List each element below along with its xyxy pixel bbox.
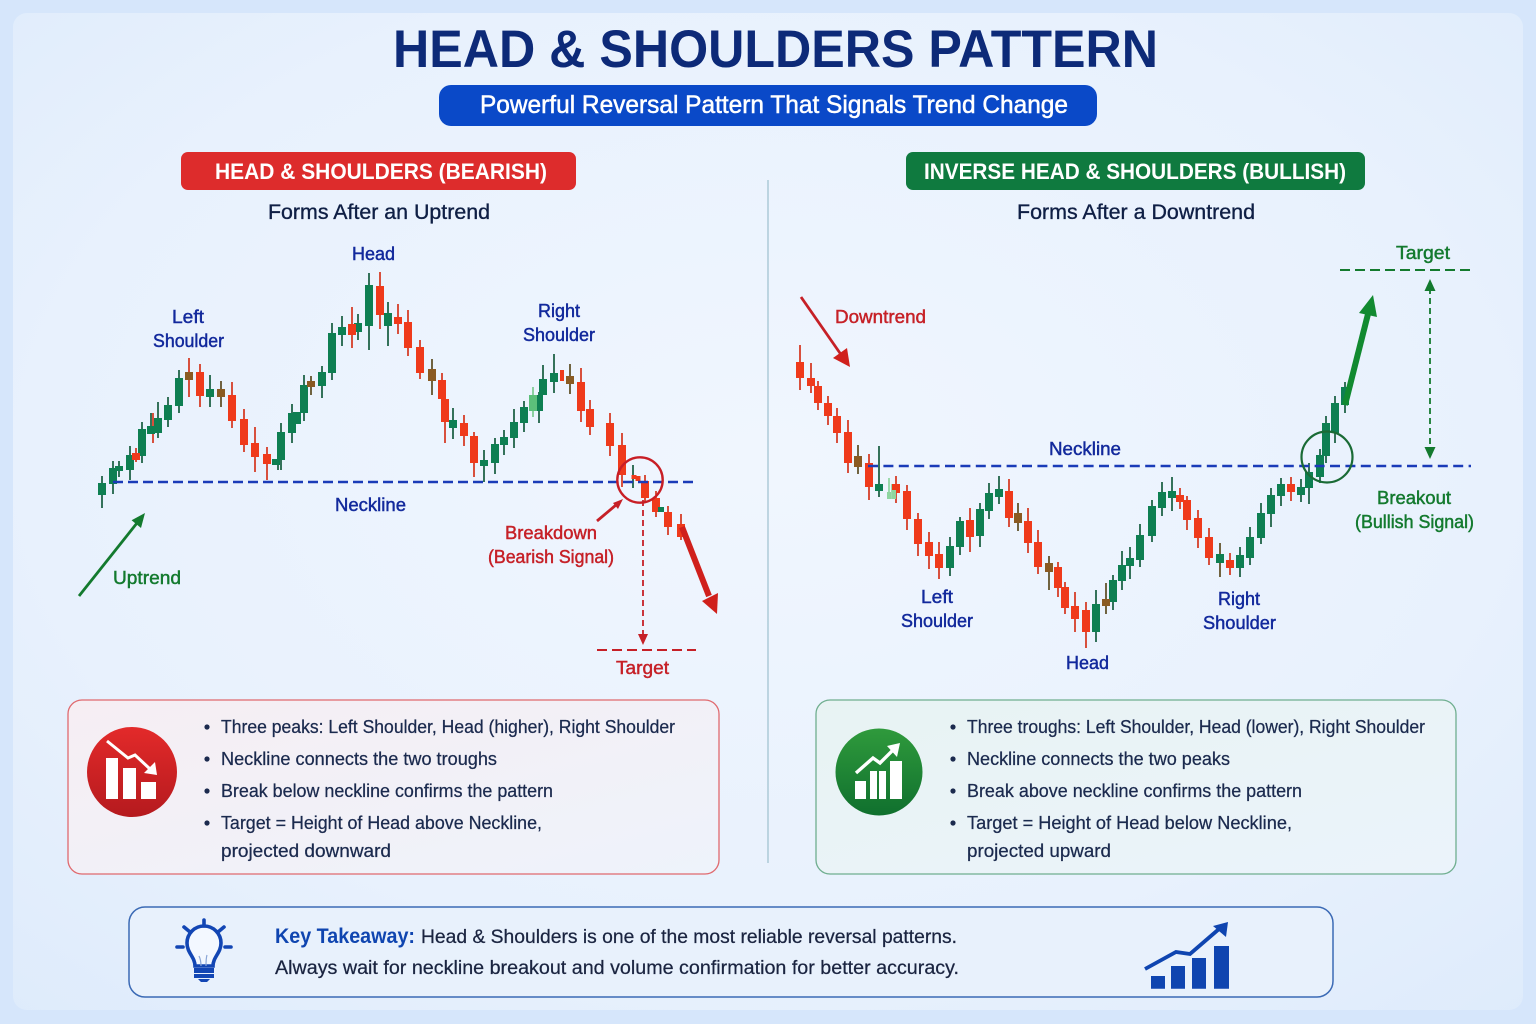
bearish bullet list — [204, 717, 675, 861]
bullish bullet list: Break above neckline confirms the pattern — [967, 781, 1302, 801]
panel: key takeaway — [129, 907, 1333, 997]
label: breakdown: (Bearish Signal) — [488, 547, 614, 567]
chart: inverse head and shoulders candlesticks — [800, 345, 1345, 648]
label: left shoulder: Shoulder — [901, 611, 973, 631]
bullish subheading: Forms After a Downtrend — [1017, 201, 1255, 224]
chart: bearish head and shoulders candlesticks — [102, 272, 681, 540]
arrow: breakdown pointer — [597, 499, 623, 521]
icon: falling bar chart — [87, 727, 177, 817]
bearish bullet list: Break below neckline confirms the pattern — [221, 781, 553, 801]
label: neckline: Neckline — [335, 495, 406, 515]
bearish bullet list: projected downward — [221, 841, 391, 861]
bearish badge: HEAD & SHOULDERS (BEARISH) — [215, 159, 547, 184]
bullish badge — [906, 152, 1365, 190]
arrow: uptrend — [79, 513, 145, 596]
label: bullish target: Target — [1396, 243, 1450, 263]
bullish neckline — [868, 465, 1471, 467]
label: breakout: (Bullish Signal) — [1355, 512, 1474, 532]
takeaway text: Head & Shoulders is one of the most reliable reversal patterns. — [421, 926, 957, 948]
bearish bullet list: Three peaks: Left Shoulder, Head (higher), Right Shoulder — [221, 717, 675, 737]
icon: light bulb — [177, 920, 231, 982]
bearish bullet list: Neckline connects the two troughs — [221, 749, 497, 769]
subtitle pill: Powerful Reversal Pattern That Signals Trend Change — [480, 91, 1068, 119]
bullish bullet list: Target = Height of Head below Neckline, — [967, 813, 1292, 833]
subtitle pill — [439, 85, 1097, 126]
label: neckline: Neckline — [1049, 439, 1121, 459]
label: breakdown: Breakdown — [505, 523, 597, 543]
arrow: bearish projection — [682, 527, 718, 614]
bullish bullet list: projected upward — [967, 841, 1111, 861]
label: bearish target: Target — [616, 658, 669, 678]
panel: bullish notes — [816, 700, 1456, 874]
label: left shoulder: Left — [172, 307, 204, 327]
bearish bullet list: Target = Height of Head above Neckline, — [221, 813, 542, 833]
label: uptrend: Uptrend — [113, 568, 181, 588]
label: head: Head — [352, 244, 395, 264]
takeaway text: Key Takeaway: — [275, 925, 415, 948]
bullish bullet list: Three troughs: Left Shoulder, Head (lower), Right Shoulder — [967, 717, 1425, 737]
label: left shoulder: Shoulder — [153, 331, 224, 351]
bearish badge — [181, 152, 576, 190]
bearish neckline — [113, 481, 696, 483]
icon: rising bar chart — [836, 728, 922, 816]
label: breakout: Breakout — [1377, 488, 1451, 508]
label: right shoulder: Shoulder — [1203, 613, 1276, 633]
takeaway text: Always wait for neckline breakout and volume confirmation for better accuracy. — [275, 957, 959, 979]
bullish bullet list: Neckline connects the two peaks — [967, 749, 1230, 769]
label: right shoulder: Right — [538, 301, 580, 321]
icon: growth chart — [1145, 922, 1229, 989]
arrow: bullish projection — [1345, 295, 1377, 405]
takeaway text — [275, 925, 959, 979]
arrow: downtrend — [801, 297, 850, 367]
label: right shoulder: Shoulder — [523, 325, 595, 345]
arrow: bullish target measure — [1424, 279, 1436, 459]
label: left shoulder: Left — [921, 587, 953, 607]
bullish bullet list — [950, 717, 1425, 861]
breakdown circle — [617, 457, 663, 503]
arrow: bearish target measure — [638, 500, 648, 645]
panel: bearish notes — [68, 700, 719, 874]
label: head: Head — [1066, 653, 1109, 673]
breakout circle — [1302, 432, 1352, 482]
label: right shoulder: Right — [1218, 589, 1260, 609]
bullish badge: INVERSE HEAD & SHOULDERS (BULLISH) — [924, 159, 1346, 184]
title: HEAD & SHOULDERS PATTERN — [393, 20, 1158, 79]
label: downtrend: Downtrend — [835, 307, 926, 327]
bearish subheading: Forms After an Uptrend — [268, 201, 490, 224]
